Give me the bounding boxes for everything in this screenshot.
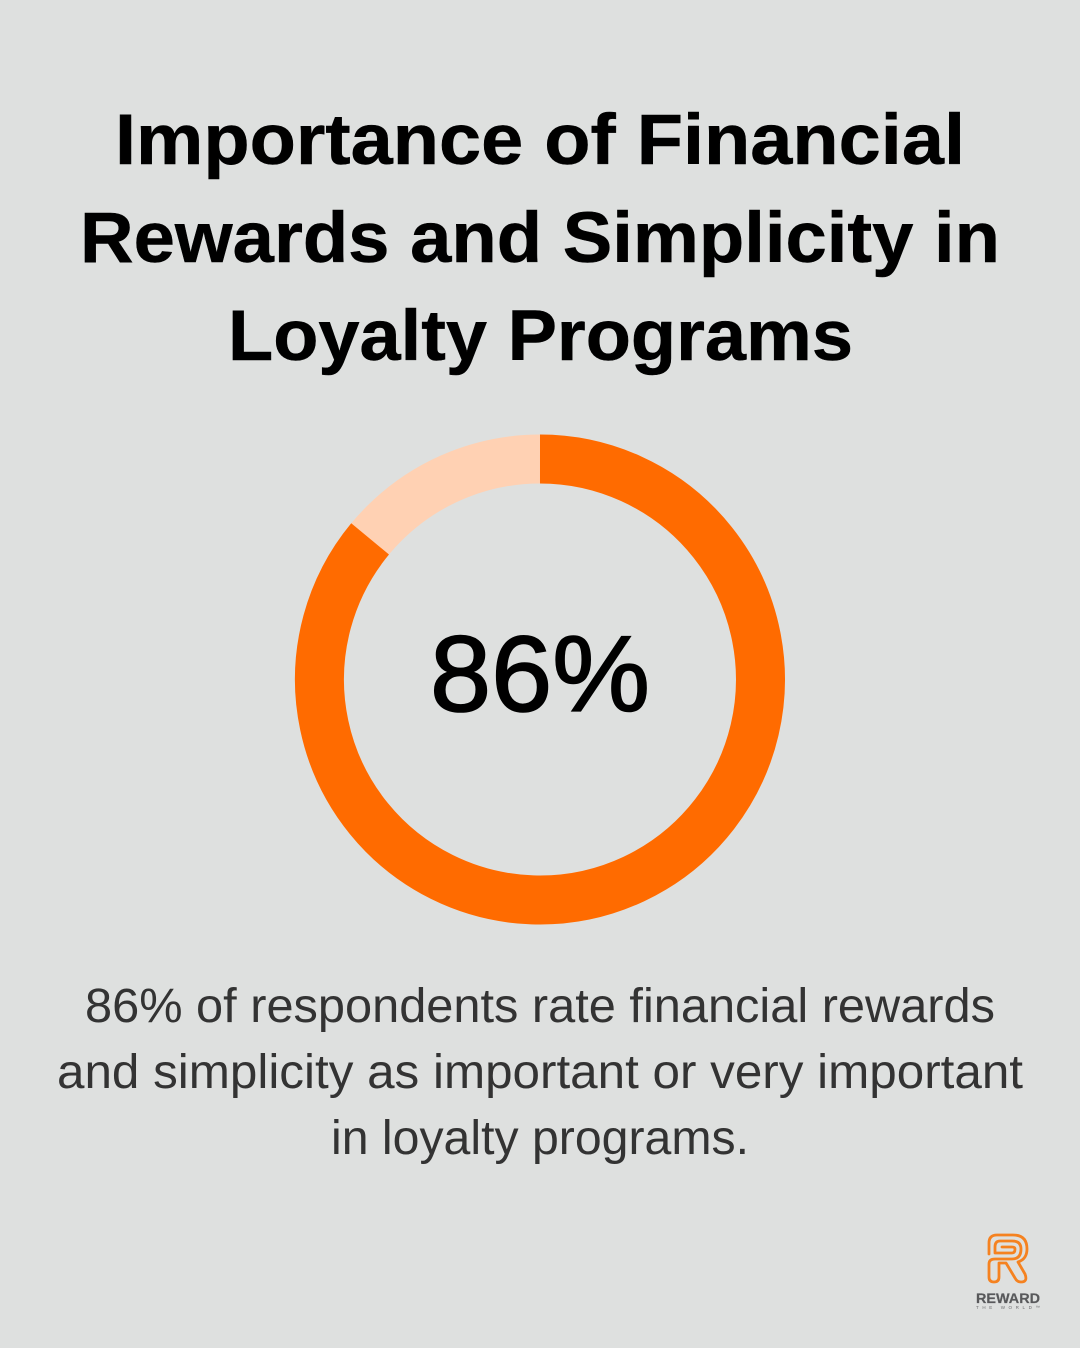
description text — [57, 980, 1023, 1165]
description text: and simplicity as important or very important — [57, 1046, 1023, 1099]
ring value: 86% — [319, 459, 760, 900]
logo: Reward the World — [976, 1235, 1040, 1310]
description text: 86% of respondents rate financial rewards — [85, 980, 995, 1033]
center value: 86% — [430, 613, 650, 734]
description text: in loyalty programs. — [331, 1112, 749, 1165]
logo wordmark: REWARD — [976, 1291, 1040, 1306]
title: Loyalty Programs — [228, 297, 853, 376]
title: Importance of Financial — [115, 101, 965, 180]
title — [80, 101, 1000, 376]
logo tagline: THE WORLD™ — [976, 1305, 1040, 1310]
title: Rewards and Simplicity in — [80, 199, 1000, 278]
icon: R mark — [989, 1235, 1027, 1282]
ring track: remaining 14% — [320, 459, 760, 900]
donut chart: 86% — [319, 459, 760, 900]
